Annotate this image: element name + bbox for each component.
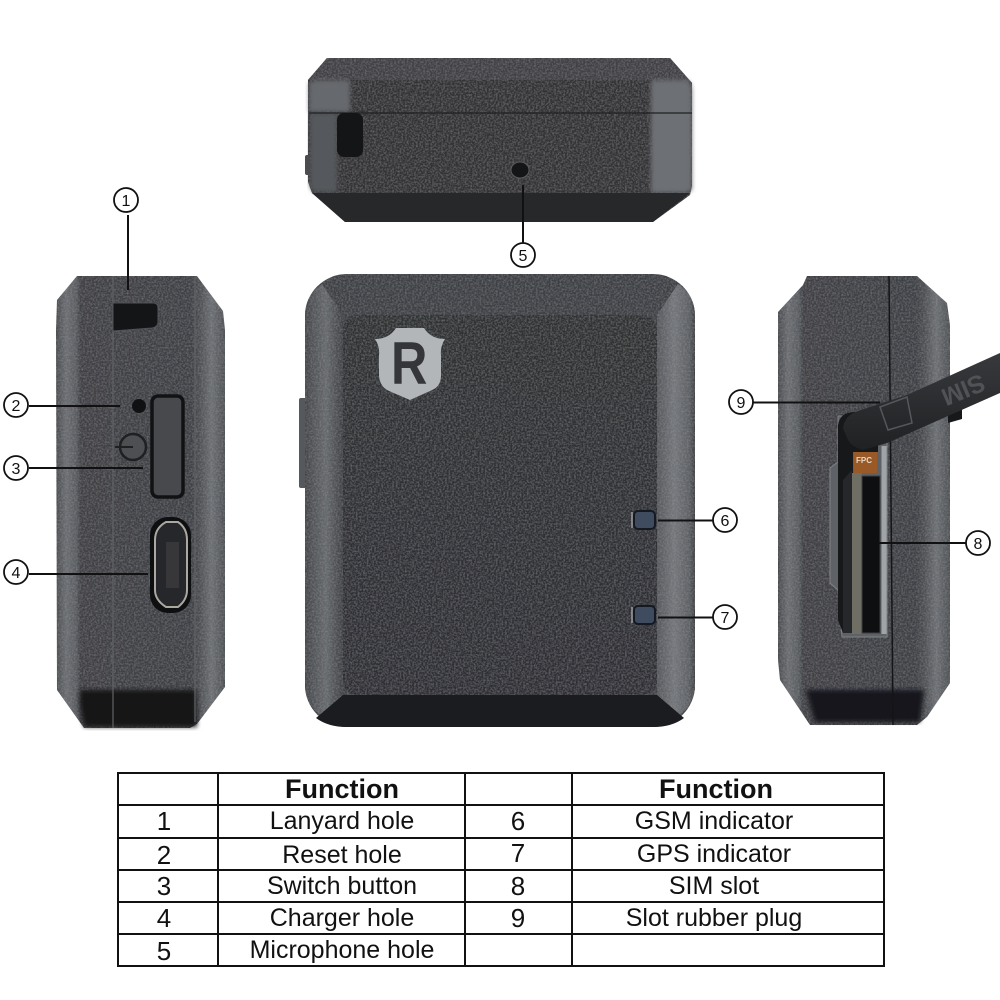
table right column: 9	[511, 903, 525, 933]
bottom shadow band	[80, 690, 197, 727]
GPS LED	[632, 606, 655, 624]
table left column: 1	[157, 806, 171, 836]
callout 2	[4, 393, 120, 417]
table left column: Charger hole	[270, 904, 414, 932]
table right column: Slot rubber plug	[626, 904, 802, 932]
table right column: GPS indicator	[637, 840, 791, 868]
table right column	[511, 774, 802, 933]
callout 6	[658, 508, 737, 532]
device: top view	[305, 58, 692, 222]
table left column	[157, 774, 434, 966]
device: right side view	[778, 276, 1000, 725]
device: left side view	[56, 276, 225, 728]
callout 5: 5	[519, 248, 528, 265]
table right column: 7	[511, 838, 525, 868]
function table	[118, 773, 884, 966]
table left column: 3	[157, 871, 171, 901]
table left column: Function	[285, 774, 399, 804]
SIM slot: FPC	[856, 456, 872, 465]
callout 4	[4, 560, 148, 584]
callout 8: 8	[974, 536, 983, 553]
front bottom bevel	[316, 695, 684, 727]
rubber plug strap: SIM	[937, 368, 989, 411]
icon: shield logo	[375, 328, 445, 400]
device: front view	[299, 274, 695, 727]
seam	[889, 276, 893, 725]
edge highlights	[309, 80, 692, 222]
callout 9: 9	[737, 395, 746, 412]
icon: shield logo: R	[391, 330, 427, 397]
charger port	[150, 517, 191, 613]
table left column: Switch button	[267, 872, 417, 900]
front left bezel	[305, 284, 343, 716]
table grid	[118, 773, 884, 966]
rubber plug strap	[843, 353, 1000, 450]
GSM LED	[632, 511, 655, 529]
SIM slot inner	[862, 476, 880, 633]
table left column: 2	[157, 840, 171, 870]
table right column: GSM indicator	[635, 807, 793, 835]
table right column: Function	[659, 774, 773, 804]
table left column: Lanyard hole	[270, 807, 414, 835]
table left column: Microphone hole	[250, 936, 434, 964]
callout 9	[729, 390, 880, 414]
SIM slot	[830, 412, 887, 637]
callout 3	[4, 456, 143, 480]
seam	[113, 277, 195, 728]
reset hole	[132, 399, 146, 413]
table left column: Reset hole	[282, 841, 402, 869]
table right column: 6	[511, 806, 525, 836]
callout 5	[511, 185, 535, 267]
side button	[305, 155, 310, 175]
power icon	[115, 434, 146, 460]
lanyard hole	[113, 303, 158, 331]
callout 2: 2	[12, 398, 21, 415]
callout 1: 1	[122, 193, 131, 210]
callout 8	[878, 531, 990, 555]
callout 6: 6	[721, 513, 730, 530]
microphone hole	[511, 162, 529, 178]
table right column: SIM slot	[669, 872, 759, 900]
main label panel	[343, 315, 657, 695]
callouts	[4, 185, 990, 629]
table left column: 5	[157, 936, 171, 966]
table right column: 8	[511, 871, 525, 901]
callout 1	[114, 188, 138, 290]
top bevel	[308, 58, 692, 83]
card edge	[852, 473, 862, 634]
table left column: 4	[157, 903, 171, 933]
front right bezel	[657, 284, 695, 716]
switch button	[152, 396, 183, 497]
callout 7	[658, 605, 737, 629]
callout 7: 7	[721, 610, 730, 627]
callout 4: 4	[12, 565, 21, 582]
FPC ribbon	[854, 452, 877, 473]
lanyard slot	[337, 113, 363, 157]
callout 3: 3	[12, 461, 21, 478]
